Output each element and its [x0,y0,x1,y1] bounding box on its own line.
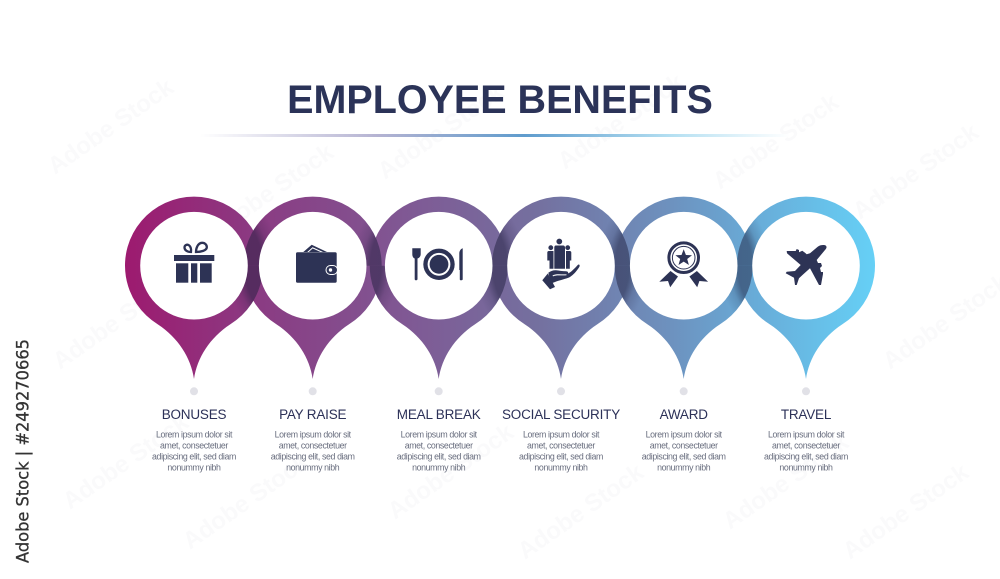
dot markers [190,387,810,395]
text block: social security: amet, consectetuer [527,440,595,450]
text block: meal break: amet, consectetuer [405,440,473,450]
text block: social security [502,407,620,472]
icon: people on a hand [542,239,580,289]
icon: gift [174,243,214,283]
text block: meal break: MEAL BREAK [397,407,481,422]
text block: meal break: nonummy nibh [412,462,466,472]
text block: social security: nonummy nibh [534,462,588,472]
text block: pay raise [271,407,355,472]
text block: bonuses: nonummy nibh [167,462,221,472]
text block: meal break: Lorem ipsum dolor sit [401,430,478,440]
text block: travel: adipiscing elit, sed diam [764,452,848,462]
text block: bonuses: adipiscing elit, sed diam [152,452,236,462]
text block: travel: TRAVEL [781,407,832,422]
text block: award: amet, consectetuer [650,440,718,450]
text: Adobe Stock [178,448,314,555]
text block: meal break: adipiscing elit, sed diam [397,452,481,462]
text block: pay raise: adipiscing elit, sed diam [271,452,355,462]
text block: award: Lorem ipsum dolor sit [646,430,723,440]
text: Adobe Stock [43,73,179,180]
text: Adobe Stock [553,68,689,175]
text block: travel [764,407,848,472]
text: Adobe Stock [373,78,509,185]
icon: plate and cutlery [412,248,463,280]
title: EMPLOYEE BENEFITS [287,78,713,122]
text: Adobe Stock [848,118,984,225]
text block: travel: nonummy nibh [779,462,833,472]
stock credit: Adobe Stock | #249270665 [14,339,34,563]
text block: social security: Lorem ipsum dolor sit [523,430,600,440]
text: Adobe Stock [708,88,844,195]
text block: pay raise: Lorem ipsum dolor sit [275,430,352,440]
pins: interlocking gradient map markers [125,196,875,379]
icon: wallet [296,245,338,283]
text block: award: nonummy nibh [657,462,711,472]
text: Adobe Stock [838,458,974,565]
text block: pay raise: amet, consectetuer [279,440,347,450]
text block: pay raise: nonummy nibh [286,462,340,472]
text: Adobe Stock [718,428,854,535]
text block: travel: amet, consectetuer [772,440,840,450]
text block: bonuses [152,407,236,472]
icon: award badge [659,243,708,287]
text block: bonuses: BONUSES [162,407,226,422]
text block: social security: SOCIAL SECURITY [502,407,620,422]
text block: meal break [397,407,481,472]
text block: award: adipiscing elit, sed diam [642,452,726,462]
text: Adobe Stock [383,418,519,525]
text: Adobe Stock [513,458,649,565]
text block: bonuses: amet, consectetuer [160,440,228,450]
text block: social security: adipiscing elit, sed diam [519,452,603,462]
text: Adobe Stock [48,268,184,375]
text block: travel: Lorem ipsum dolor sit [768,430,845,440]
icon: airplane [786,245,827,285]
text: Adobe Stock [203,138,339,245]
text: Adobe Stock [58,408,194,515]
text block: pay raise: PAY RAISE [279,407,347,422]
text block: award: AWARD [660,407,708,422]
text block: bonuses: Lorem ipsum dolor sit [156,430,233,440]
text block: award [642,407,726,472]
